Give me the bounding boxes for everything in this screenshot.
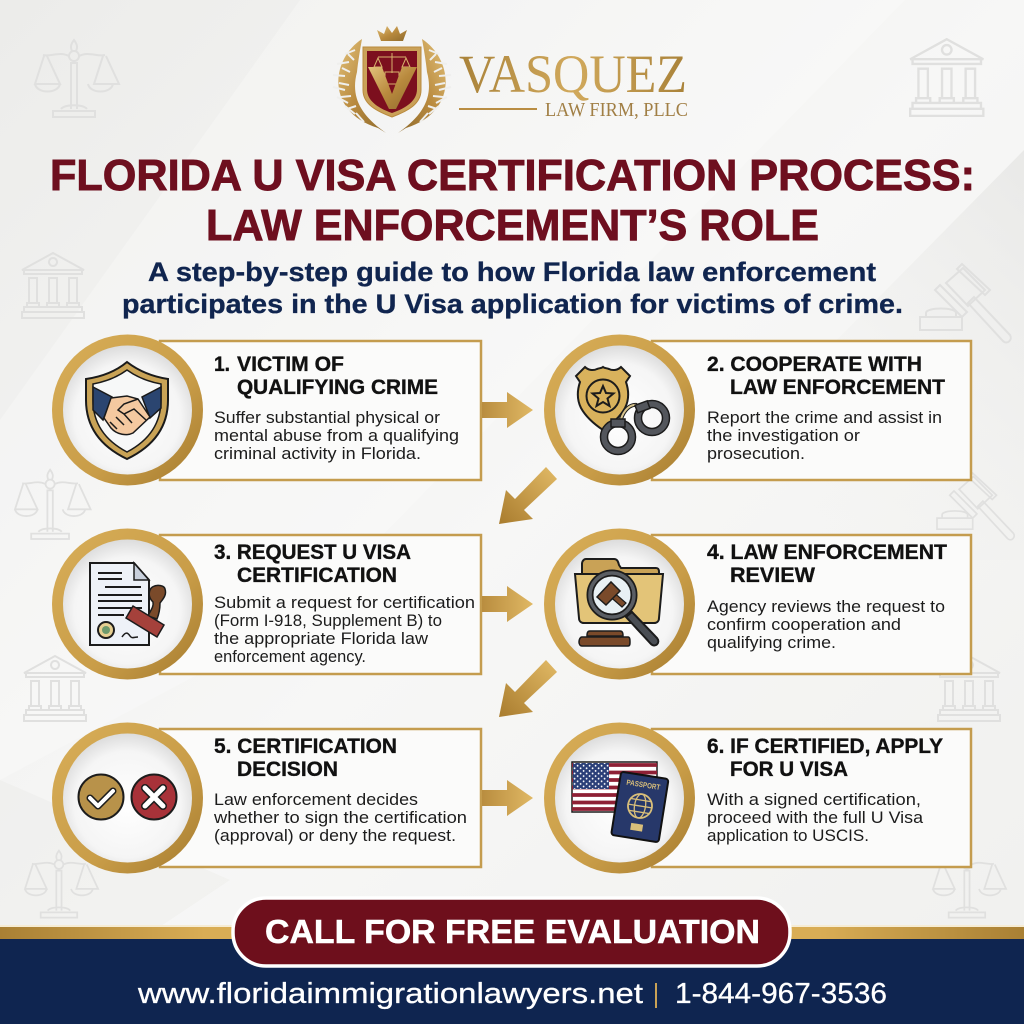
- logo: Vasquez Law Firm: [333, 26, 688, 133]
- arrow: step 3 to 4: [482, 586, 533, 622]
- call to action button: [233, 898, 790, 966]
- icon: shield: [363, 47, 421, 117]
- subtitle: participates in the U Visa application for victims of crime.: [122, 289, 903, 319]
- card frame: [160, 341, 481, 480]
- step 3 heading: [214, 541, 411, 587]
- step 4 heading: [707, 541, 947, 587]
- subtitle: A step-by-step guide to how Florida law enforcement: [148, 257, 876, 287]
- card frame: [652, 341, 971, 480]
- icon: check and cross: [78, 774, 176, 820]
- step 6 text: [707, 791, 924, 845]
- step 1 heading: [214, 353, 438, 399]
- title: LAW ENFORCEMENT’S ROLE: [206, 201, 819, 250]
- card frame: [652, 535, 971, 674]
- title: FLORIDA U VISA CERTIFICATION PROCESS:: [50, 151, 975, 200]
- medallion ring: [52, 528, 203, 680]
- step 1 text: criminal activity in Florida.: [214, 445, 421, 463]
- icon: US flag and passport: PASSPORT: [626, 778, 661, 792]
- step 3 text: (Form I-918, Supplement B) to: [214, 612, 442, 630]
- step 2 text: Report the crime and assist in: [707, 409, 942, 427]
- title: [50, 151, 975, 250]
- card frame: [652, 729, 971, 867]
- icon: folder, magnifier and gavel: [575, 559, 663, 646]
- arrow: step 2 to 3: [499, 467, 557, 524]
- step 3 text: Submit a request for certification: [214, 594, 475, 612]
- contact line: 1-844-967-3536: [675, 978, 887, 1010]
- step 5 text: whether to sign the certification: [213, 809, 467, 827]
- step 5 heading: [214, 735, 397, 781]
- logo wordmark: VASQUEZ: [459, 44, 687, 104]
- step 1 text: [214, 409, 459, 463]
- step 5 card: [52, 722, 481, 874]
- contact line: [137, 978, 887, 1010]
- call to action button: CALL FOR FREE EVALUATION: [265, 913, 760, 950]
- step 2 text: [707, 409, 942, 463]
- step 5 heading: DECISION: [237, 758, 338, 781]
- step 2 text: prosecution.: [707, 445, 805, 463]
- step 2 heading: [707, 353, 945, 399]
- step 6 card: [544, 722, 971, 874]
- contact line: www.floridaimmigrationlawyers.net: [137, 978, 643, 1010]
- arrow: step 5 to 6: [482, 780, 533, 816]
- icon: police badge and handcuffs: [576, 367, 666, 451]
- subtitle: [122, 257, 903, 319]
- step 5 text: (approval) or deny the request.: [214, 827, 456, 845]
- step 4 text: [707, 598, 945, 652]
- medallion ring: [52, 722, 203, 874]
- icon: document and stamp: [90, 563, 166, 645]
- icon: shield with handshake: [86, 362, 168, 459]
- step 4 heading: 4. LAW ENFORCEMENT: [707, 541, 947, 564]
- step 6 heading: 6. IF CERTIFIED, APPLY: [707, 735, 943, 758]
- step 3 card: [52, 528, 481, 680]
- step 1 heading: 1.: [214, 353, 230, 376]
- card frame: [160, 729, 481, 867]
- step 1 text: mental abuse from a qualifying: [214, 427, 459, 445]
- card frame: [160, 535, 481, 674]
- step 5 text: [213, 791, 467, 845]
- medallion ring: [544, 722, 695, 874]
- step 1 text: Suffer substantial physical or: [214, 409, 441, 427]
- step 4 card: [544, 528, 971, 680]
- step 4 text: Agency reviews the request to: [707, 598, 945, 616]
- step 4 text: confirm cooperation and: [707, 616, 901, 634]
- step 4 text: qualifying crime.: [707, 634, 836, 652]
- step 6 heading: FOR U VISA: [730, 758, 848, 781]
- step 3 text: enforcement agency.: [214, 648, 366, 666]
- step 2 card: [544, 334, 971, 486]
- step 5 heading: 5. CERTIFICATION: [214, 735, 397, 758]
- step 3 heading: CERTIFICATION: [237, 564, 397, 587]
- medallion ring: [544, 334, 695, 486]
- step 2 text: the investigation or: [707, 427, 861, 445]
- step 2 heading: LAW ENFORCEMENT: [730, 376, 945, 399]
- step 3 heading: 3. REQUEST U VISA: [214, 541, 411, 564]
- arrow: step 1 to 2: [482, 392, 533, 428]
- logo subline: LAW FIRM, PLLC: [545, 99, 688, 121]
- step 6 text: With a signed certification,: [707, 791, 921, 809]
- step 1 card: [52, 334, 481, 486]
- step 5 text: Law enforcement decides: [214, 791, 418, 809]
- step 1 heading: QUALIFYING CRIME: [237, 376, 438, 399]
- step 6 text: proceed with the full U Visa: [707, 809, 924, 827]
- step 6 text: application to USCIS.: [707, 827, 869, 845]
- step 1 heading: VICTIM OF: [237, 353, 344, 376]
- step 4 heading: REVIEW: [730, 564, 815, 587]
- step 2 heading: 2. COOPERATE WITH: [707, 353, 922, 376]
- icon: laurel wreath: [333, 39, 451, 133]
- icon: crown: [377, 26, 407, 41]
- step 3 text: [214, 594, 475, 666]
- footer band: [0, 925, 1024, 1024]
- medallion ring: [544, 528, 695, 680]
- icon: US flag and passport: [572, 762, 669, 842]
- arrow: step 4 to 5: [499, 660, 557, 717]
- step 6 heading: [707, 735, 943, 781]
- medallion ring: [52, 334, 203, 486]
- step 3 text: the appropriate Florida law: [214, 630, 428, 648]
